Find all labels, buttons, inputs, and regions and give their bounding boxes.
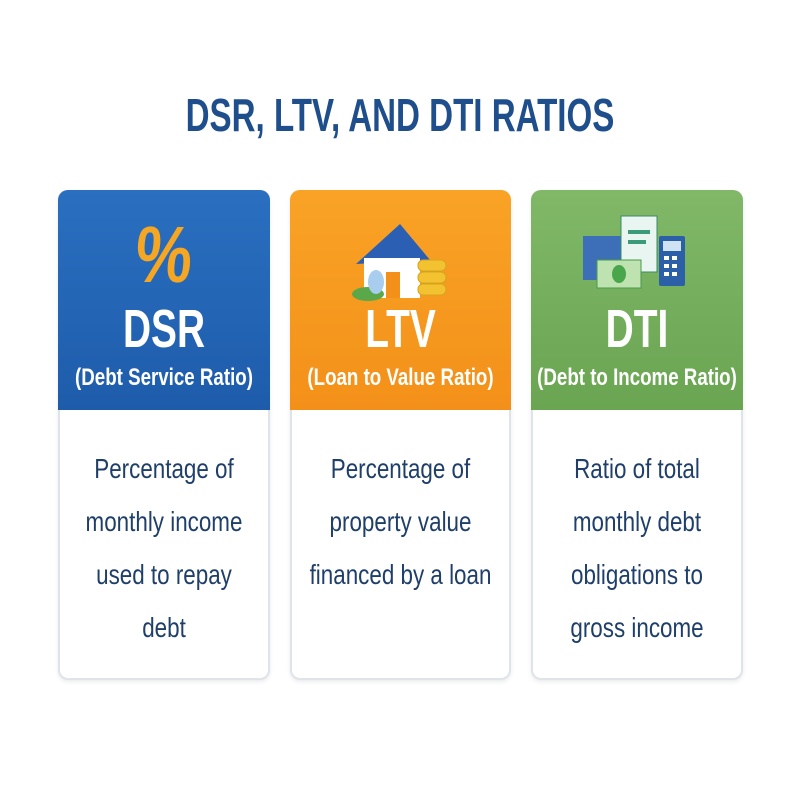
- full name DSR: (Debt Service Ratio): [75, 364, 253, 391]
- description DTI: monthly debt: [573, 506, 701, 537]
- description LTV: Percentage of: [331, 453, 470, 484]
- icon: house and coins: [352, 224, 446, 301]
- description DSR: Percentage of: [94, 453, 234, 484]
- description DSR: used to repay: [96, 559, 232, 590]
- title: DSR, LTV, AND DTI RATIOS: [186, 89, 614, 141]
- description LTV: property value: [330, 506, 471, 537]
- header: LTV: [290, 190, 511, 410]
- full name LTV: (Loan to Value Ratio): [307, 364, 494, 391]
- abbreviation LTV: LTV: [365, 299, 436, 359]
- icon: percent: %: [132, 210, 196, 299]
- description DTI: gross income: [570, 612, 704, 643]
- description DSR: [86, 453, 242, 643]
- description DTI: Ratio of total: [574, 453, 700, 484]
- panel: DSR: [58, 190, 270, 680]
- panel: LTV: [290, 190, 511, 680]
- description LTV: financed by a loan: [310, 559, 491, 590]
- description DTI: obligations to: [571, 559, 703, 590]
- header: DTI: [531, 190, 743, 410]
- abbreviation DTI: DTI: [606, 299, 668, 359]
- description DSR: debt: [142, 612, 186, 643]
- description DTI: [570, 453, 704, 643]
- panel: DTI: [531, 190, 743, 680]
- description LTV: [310, 453, 491, 590]
- description DSR: monthly income: [86, 506, 242, 537]
- icon: documents and calculator: [583, 216, 685, 288]
- full name DTI: (Debt to Income Ratio): [537, 364, 737, 391]
- header: DSR: [58, 190, 270, 410]
- abbreviation DSR: DSR: [123, 299, 205, 359]
